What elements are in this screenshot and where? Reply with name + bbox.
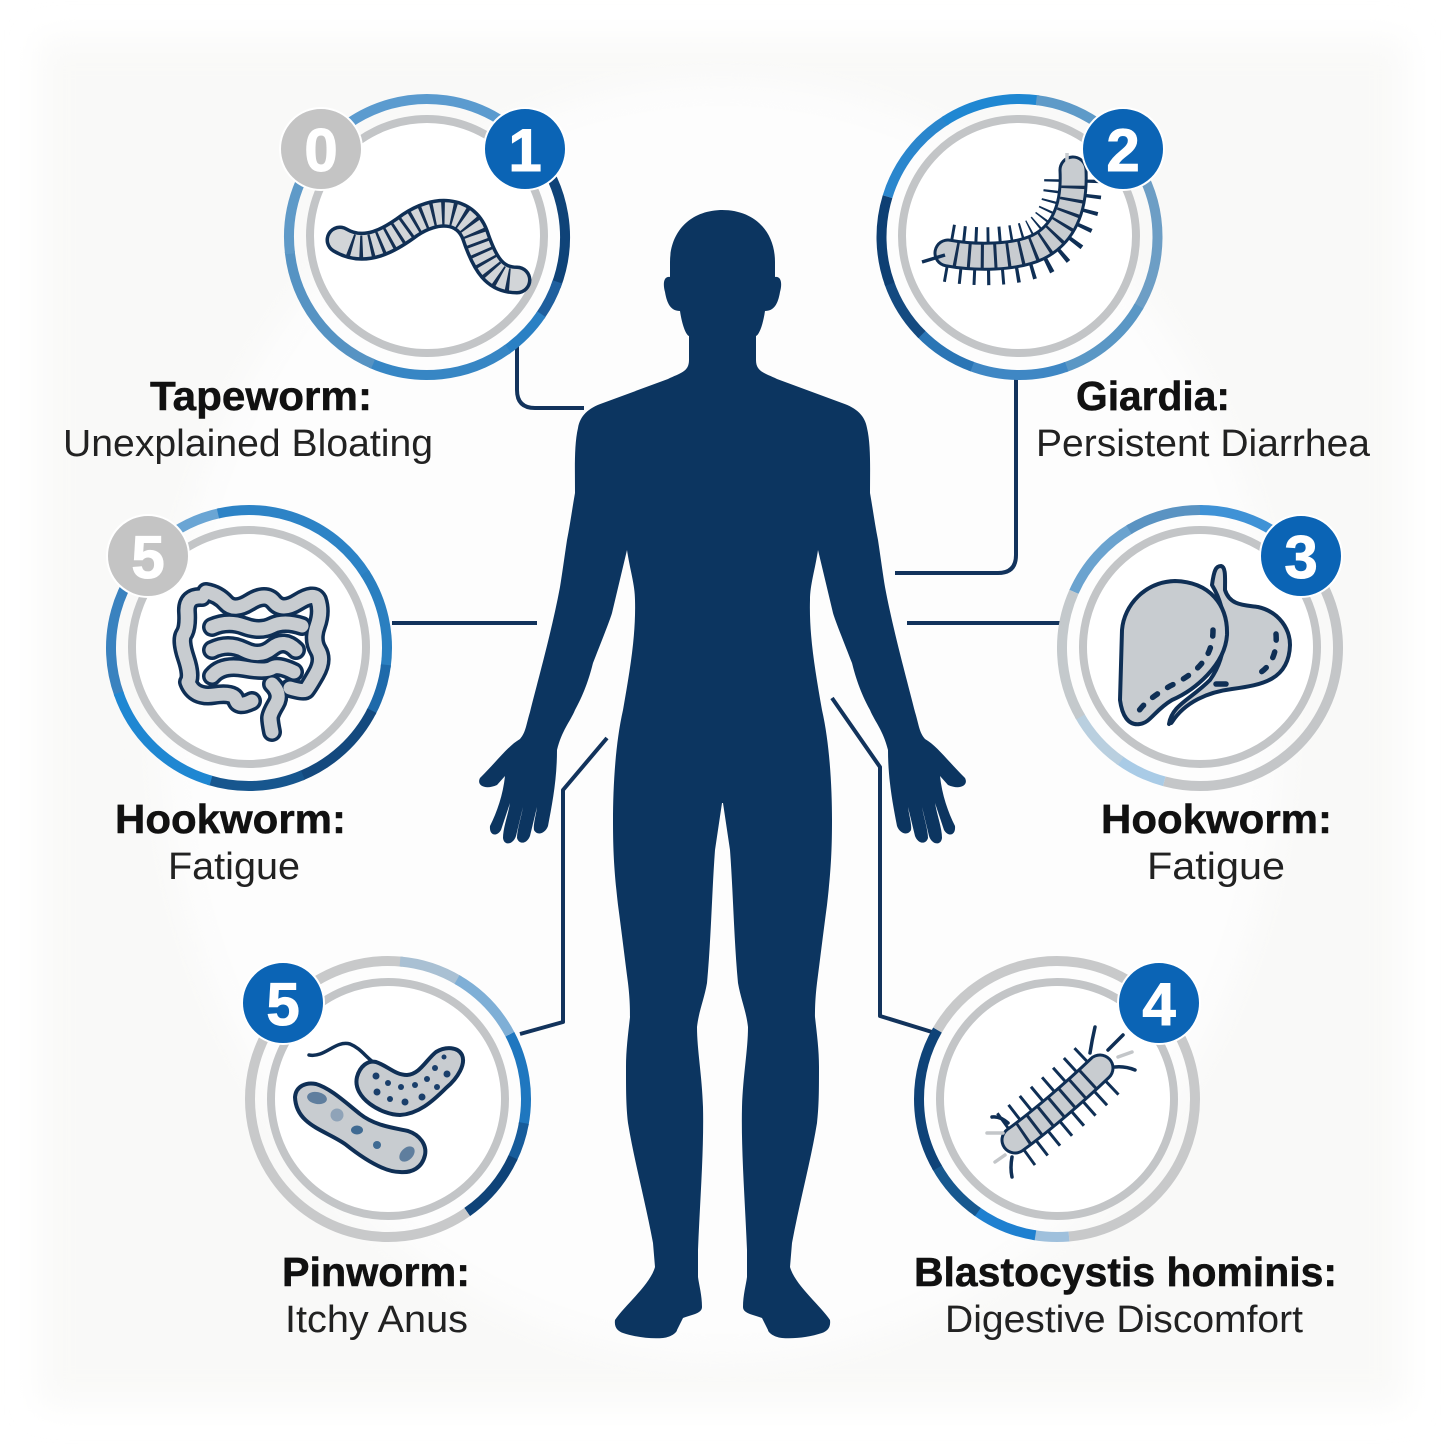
label: hookworm right <box>1101 796 1332 888</box>
badge: 1 <box>484 108 566 190</box>
label: blastocystis hominis: Digestive Discomfort <box>945 1299 1303 1341</box>
connector lines <box>392 345 1060 1034</box>
badge: 5 blue <box>242 962 324 1044</box>
label: giardia <box>1036 373 1371 465</box>
badge: 5 grey <box>107 515 189 597</box>
label: tapeworm <box>63 373 433 465</box>
label: hookworm right: Hookworm: <box>1101 796 1332 842</box>
label: giardia: Giardia: <box>1076 373 1230 419</box>
label: blastocystis hominis <box>914 1249 1337 1341</box>
panel: tapeworm <box>233 43 621 431</box>
label: giardia: Persistent Diarrhea <box>1036 423 1371 465</box>
label: tapeworm: Tapeworm: <box>150 373 372 419</box>
icon: giardia larva <box>922 153 1073 262</box>
badge: 3: 3 <box>1284 524 1318 591</box>
panel: bacteria <box>194 905 582 1293</box>
label: pinworm: Itchy Anus <box>285 1299 468 1341</box>
panel: blastocystis <box>863 905 1251 1293</box>
badge: 2 <box>1082 108 1164 190</box>
label: hookworm left <box>115 796 346 888</box>
badge: 4: 4 <box>1142 971 1176 1038</box>
label: hookworm right: Fatigue <box>1147 846 1285 888</box>
icon: bacteria <box>295 1043 463 1172</box>
icon: blastocystis larva <box>987 1027 1135 1177</box>
icon: liver <box>1120 566 1290 724</box>
badge: 0: 0 <box>304 117 338 184</box>
badge: 0 <box>280 108 362 190</box>
badge: 5 grey: 5 <box>131 524 165 591</box>
label: hookworm left: Hookworm: <box>115 796 346 842</box>
panel: liver <box>1006 454 1394 842</box>
badge: 3 <box>1260 515 1342 597</box>
badge: 5 blue: 5 <box>266 971 300 1038</box>
label: pinworm: Pinworm: <box>282 1249 470 1295</box>
badge: 2: 2 <box>1106 117 1140 184</box>
label: blastocystis hominis: Blastocystis hominis: <box>914 1249 1337 1295</box>
label: tapeworm: Unexplained Bloating <box>63 423 433 465</box>
panel: intestine <box>55 454 443 842</box>
label: pinworm <box>282 1249 470 1341</box>
label: hookworm left: Fatigue <box>168 846 300 888</box>
icon: tapeworm <box>340 213 517 280</box>
badge: 4 <box>1118 962 1200 1044</box>
panel: giardia <box>824 42 1215 432</box>
badge: 1: 1 <box>508 117 542 184</box>
human body silhouette <box>479 210 966 1338</box>
icon: intestine <box>182 592 321 732</box>
